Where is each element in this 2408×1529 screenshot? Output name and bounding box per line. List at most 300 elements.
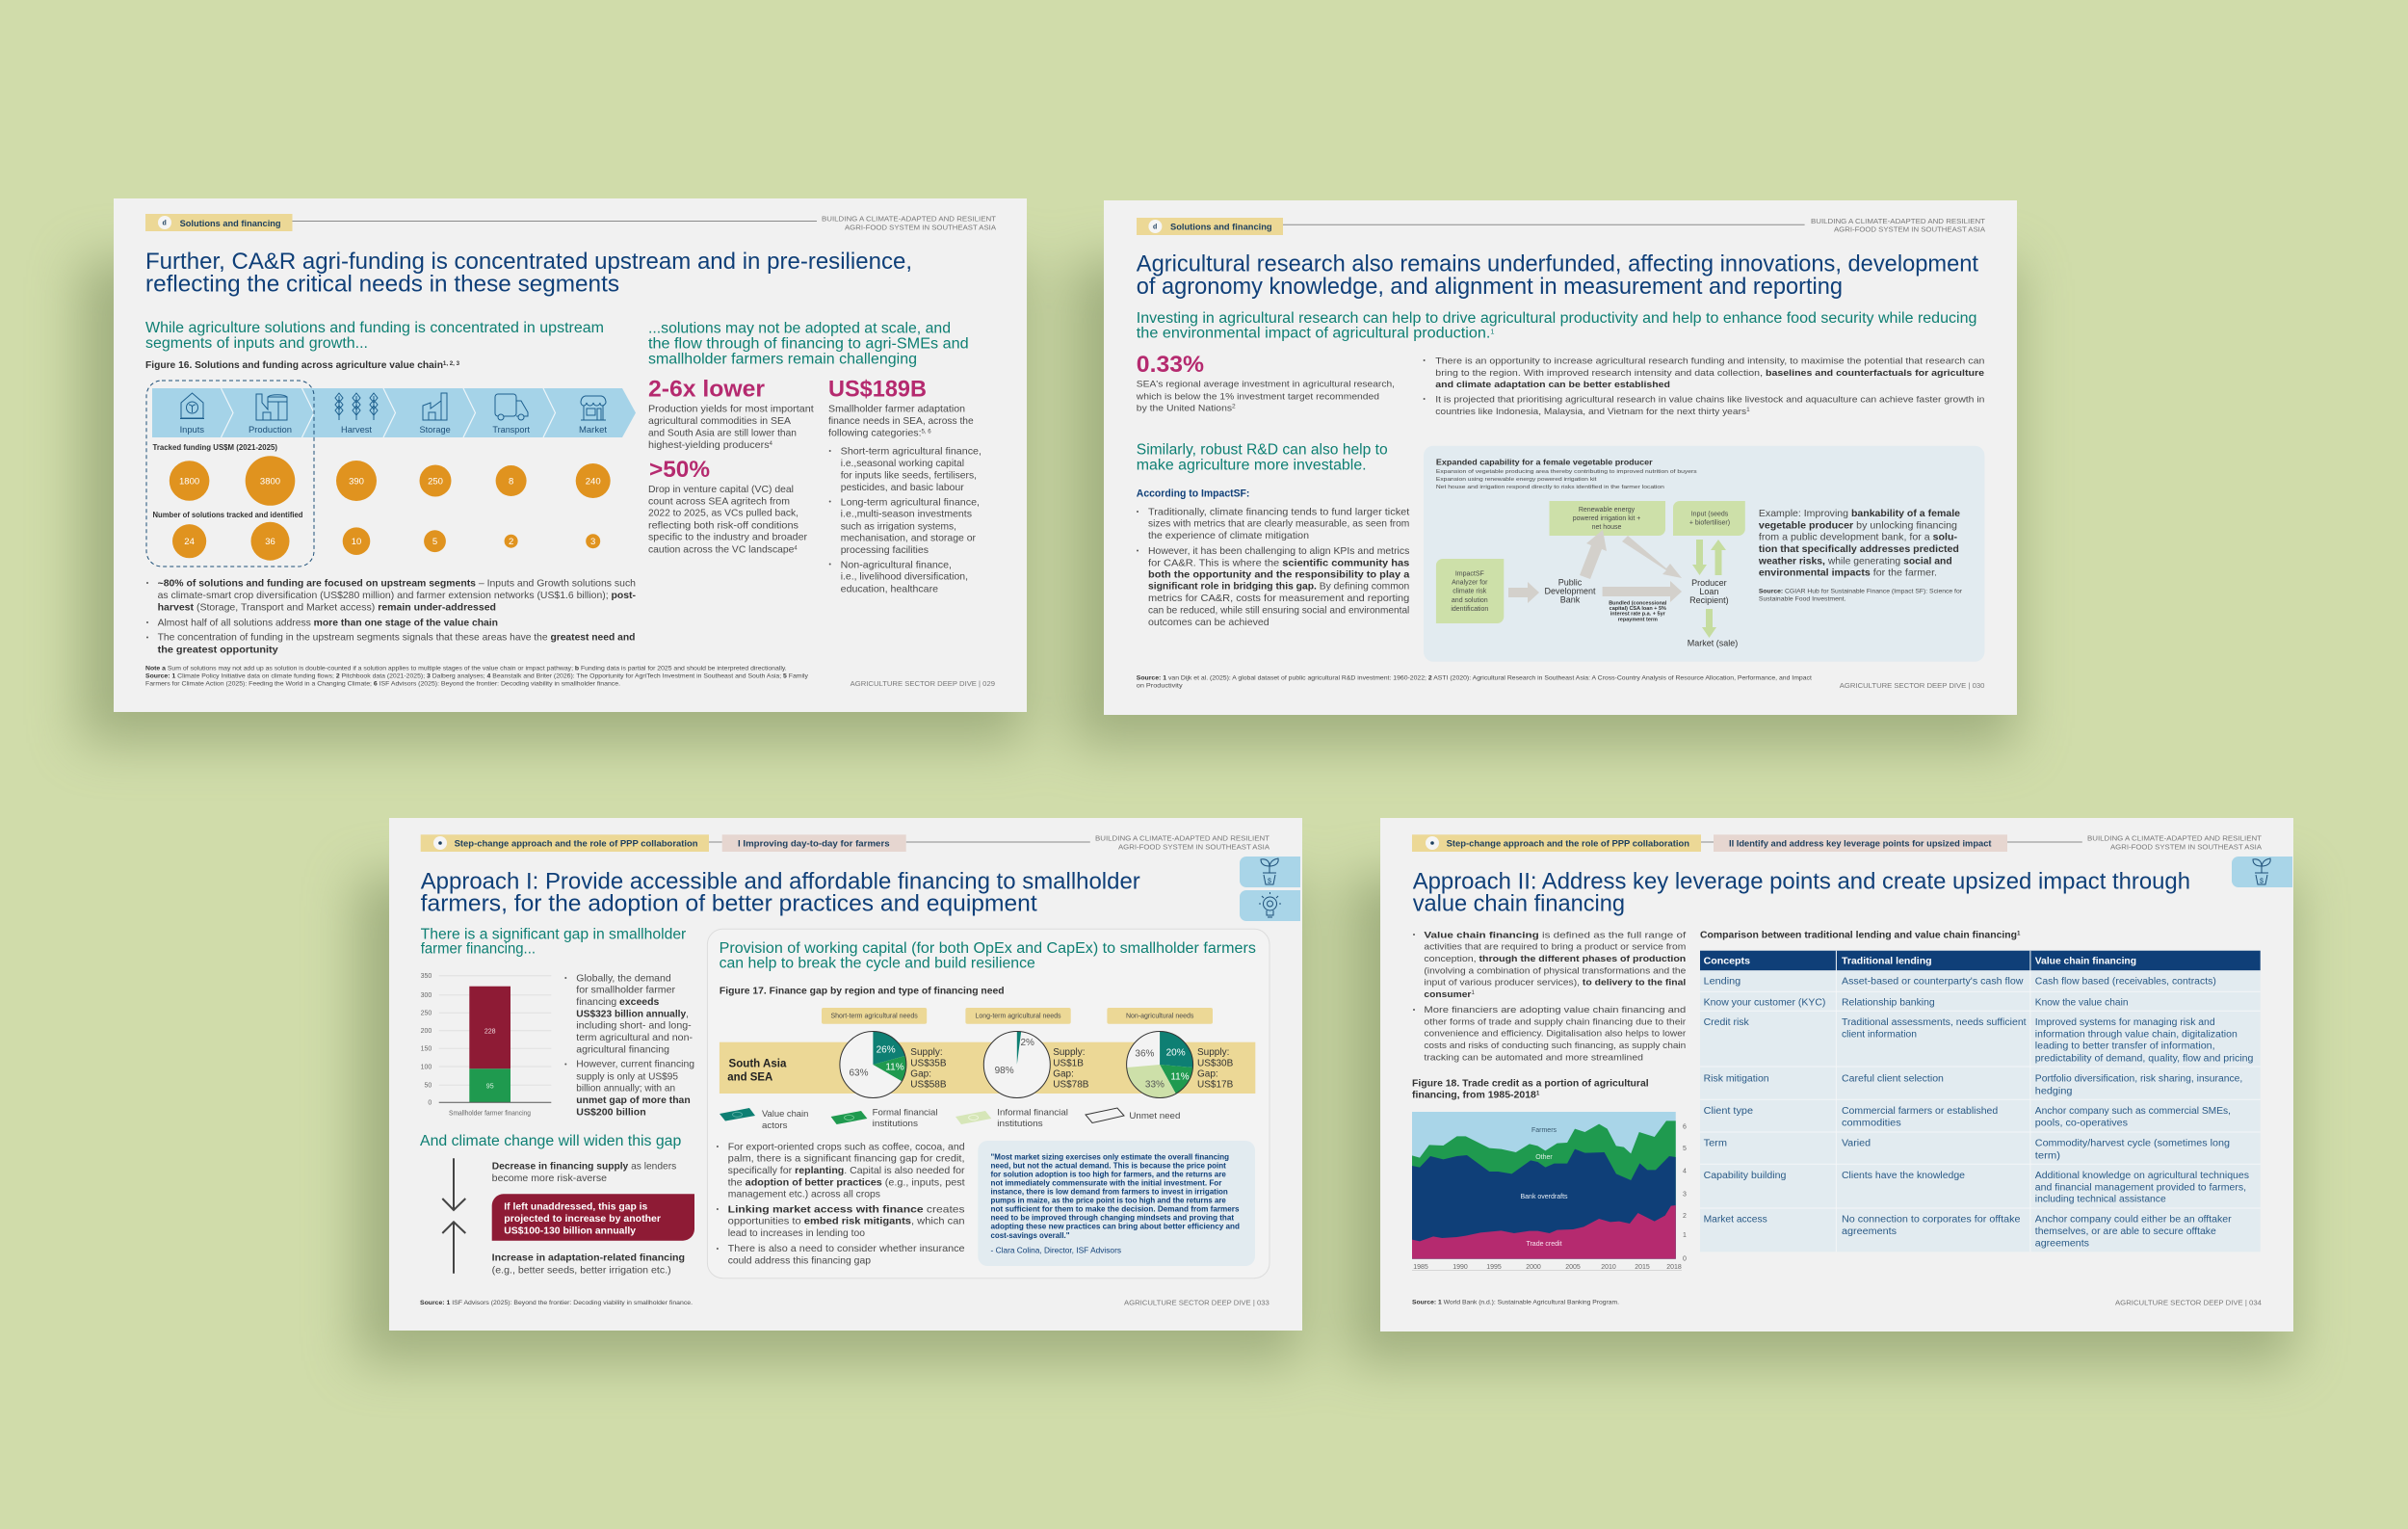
- figure 17 caption: Figure 17. Finance gap by region and type of financing need: [720, 987, 1005, 997]
- stacked bar chart: 300: [421, 992, 432, 999]
- box: renewable energy kit: Renewable energy: [1579, 507, 1636, 514]
- left heading: farmer financing...: [421, 940, 536, 957]
- diagram labels: repayment term: [1618, 617, 1658, 622]
- legend: Value chain: [762, 1109, 808, 1120]
- value chain bullets: tracking can be automated and more streamlined: [1424, 1052, 1643, 1063]
- row: market access: No connection to corporates for offtake: [1842, 1215, 2021, 1226]
- row: client type: Commercial farmers or established: [1842, 1106, 1998, 1117]
- legend: Informal financial: [997, 1107, 1068, 1118]
- area chart: trade credit: 2: [1683, 1213, 1687, 1220]
- financing need pills: Long-term agricultural needs: [975, 1014, 1061, 1020]
- text: increase in adaptation financing: [492, 1252, 685, 1276]
- quote box: adopting these new practices can bring about better efficiency and: [990, 1222, 1240, 1231]
- solutions count bubbles: 3: [590, 537, 595, 547]
- supply and gap figures: US$78B: [1053, 1080, 1089, 1091]
- table caption: 1: [2017, 931, 2021, 936]
- quote box: - Clara Colina, Director, ISF Advisors: [990, 1245, 1121, 1254]
- supply and gap figures: [910, 1047, 1234, 1091]
- subtitle: Investing in agricultural research can help to drive agricultural productivity and help to enhance food security while reducing: [1137, 310, 1976, 327]
- row: know your customer: Know the value chain: [2035, 997, 2129, 1008]
- panel heading: can help to break the cycle and build resilience: [720, 955, 1035, 971]
- stat: 0.33%: 0.33%: [1137, 352, 1204, 378]
- row: risk mitigation: Portfolio diversification, risk sharing, insurance,: [2035, 1074, 2242, 1085]
- row: capability building: Additional knowledge on agricultural techniques: [2035, 1171, 2249, 1181]
- page footer: AGRICULTURE SECTOR DEEP DIVE | 033: [1124, 1300, 1269, 1306]
- opportunity bullets: bring to the region. With improved research intensity and data collection, baselines and counterfactuals for agriculture: [1435, 368, 1984, 379]
- stat: over 50%: 2022 to 2025, as VCs pulled back,: [648, 508, 798, 519]
- report header: AGRI-FOOD SYSTEM IN SOUTHEAST ASIA: [845, 224, 996, 231]
- stacked bar chart: [421, 973, 551, 1118]
- supply and gap figures: US$1B: [1053, 1059, 1084, 1069]
- panel: example flow diagram: [1424, 446, 1984, 662]
- text: decrease in supply: Decrease in financing supply as lenders: [492, 1161, 676, 1173]
- panel heading: Provision of working capital (for both OpEx and CapEx) to smallholder farmers: [720, 940, 1256, 957]
- stat: US$189B: processing facilities: [841, 544, 929, 556]
- stat: US$189B: Long-term agricultural finance,: [841, 496, 980, 508]
- diagram labels: Bundled (concessional: [1609, 600, 1667, 606]
- notes and sources: Farmers for Climate Action (2025): Feeding the World in a Changing Climate; 6 ISF Advisors (2025): Beyond the frontier: Decoding viability in smallholder finance.: [145, 681, 620, 688]
- quote box: instance, there is low demand from farmers to invest in irrigation: [990, 1187, 1228, 1197]
- supply and gap figures: Supply:: [1197, 1047, 1229, 1058]
- report header: AGRI-FOOD SYSTEM IN SOUTHEAST ASIA: [2110, 844, 2262, 851]
- pie: short-term: 11%: [885, 1063, 904, 1073]
- title: Agricultural research also remains underfunded, affecting innovations, development: [1137, 251, 1978, 277]
- row: credit risk: Improved systems for managing risk and: [2035, 1017, 2215, 1028]
- chain labels: Harvest: [341, 425, 372, 435]
- row: capability building: Clients have the knowledge: [1842, 1171, 1965, 1181]
- stat: over 50%: >50%: [649, 457, 710, 483]
- example text: Sustainable Food Investment.: [1759, 596, 1846, 603]
- pie: non-agricultural: 36%: [1135, 1049, 1155, 1060]
- area chart: trade credit: 2018: [1666, 1264, 1682, 1271]
- area chart: trade credit: 4: [1683, 1168, 1687, 1175]
- stacked bar chart: 200: [421, 1028, 432, 1035]
- ImpactSF bullets: metrics for CA&R, costs for measurement and reporting: [1148, 593, 1409, 604]
- report header: [1095, 836, 1270, 851]
- financing need pills: Non-agricultural needs: [1126, 1014, 1194, 1020]
- report header: BUILDING A CLIMATE-ADAPTED AND RESILIENT: [1811, 219, 1986, 225]
- ImpactSF bullets: However, it has been challenging to align KPIs and metrics: [1148, 545, 1409, 557]
- according to ImpactSF: According to ImpactSF:: [1137, 488, 1249, 500]
- value chain bullets: More financiers are adopting value chain financing and: [1424, 1005, 1686, 1015]
- title: [1413, 868, 2190, 917]
- legend: [720, 1107, 1180, 1131]
- stat: over 50%: count across SEA agritech from: [648, 495, 790, 507]
- box: ImpactSF analyzer: and solution: [1452, 597, 1488, 604]
- chain labels: Inputs: [180, 425, 204, 435]
- row: client type: Client type: [1704, 1106, 1753, 1117]
- tracked funding bubbles: 250: [428, 476, 443, 488]
- stat: over 50%: reflecting both risk-off conditions: [648, 519, 798, 531]
- value chain bullets: (involving a combination of physical transformations and the: [1424, 965, 1686, 976]
- section tag: [421, 834, 709, 852]
- number of solutions label: Number of solutions tracked and identified: [152, 510, 302, 519]
- callout: gap projection: US$100-130 billion annually: [504, 1225, 636, 1236]
- left heading: [145, 320, 604, 352]
- pie: long-term: 98%: [995, 1066, 1014, 1076]
- ImpactSF bullets: Traditionally, climate financing tends to fund larger ticket: [1148, 506, 1409, 517]
- figure 18 caption: financing, from 1985-2018: [1412, 1090, 1531, 1100]
- quote box: pumps in maize, as the price point is too high and the returns are: [990, 1196, 1226, 1205]
- stat: US$189B: i.e.,multi-season investments: [841, 509, 972, 520]
- right heading: smallholder farmers remain challenging: [648, 351, 917, 367]
- row: credit risk: Traditional assessments, needs sufficient: [1842, 1017, 2027, 1028]
- source note: Source: 1 van Dijk et al. (2025): A global dataset of public agricultural R&D investment: 1960-2022; 2 ASTI (2020): Agricultural Research in Southeast Asia: A Cross-Country Analysis of Resource Allocation, Performance, and Impact: [1137, 675, 1812, 682]
- chain labels: Market: [579, 425, 607, 435]
- chain labels: Transport: [492, 425, 530, 435]
- panel heading: [720, 940, 1256, 971]
- stat: 2-6x lower: 4: [770, 441, 773, 447]
- area chart: trade credit: 1990: [1453, 1264, 1468, 1271]
- stat: US$189B: such as irrigation systems,: [841, 520, 956, 532]
- gap bullets: unmet gap of more than: [576, 1094, 691, 1106]
- icon: production: [256, 394, 287, 420]
- left heading: While agriculture solutions and funding is concentrated in upstream: [145, 320, 604, 336]
- panel heading: [1436, 457, 1697, 490]
- row: lending: Lending: [1704, 977, 1741, 988]
- diagram labels: Bank: [1560, 594, 1581, 604]
- title: Approach II: Address key leverage points and create upsized impact through: [1413, 868, 2190, 894]
- heading: robust R&D: [1137, 442, 1388, 474]
- arrows: input and market: [1692, 540, 1726, 638]
- notes and sources: Note a Sum of solutions may not add up as solution is double-counted if a solution applies to multiple stages of the value chain or impact pathway; b Funding data is partial for 2025 and should be interpreted directionally.: [145, 666, 787, 672]
- row: credit risk: leading to better transfer of information,: [2035, 1041, 2215, 1052]
- section tag: Solutions and financing: [1170, 222, 1272, 232]
- stat: over 50%: specific to the industry and broader: [648, 532, 807, 543]
- chain labels: Production: [249, 425, 292, 435]
- supply and gap figures: US$35B: [910, 1059, 947, 1069]
- example text: Source: CGIAR Hub for Sustainable Finance (Impact SF): Science for: [1759, 589, 1963, 595]
- section tag: d: [1153, 224, 1157, 231]
- stat: US$189B: education, healthcare: [841, 583, 938, 594]
- figure 18 caption: 1: [1536, 1091, 1540, 1096]
- arrows: capital flow: [1508, 530, 1682, 603]
- stat: 0.33%: SEA's regional average investment in agricultural research,: [1137, 380, 1395, 390]
- panel heading: Expansion of vegetable producing area thereby contributing to improved nutrition of buyers: [1436, 469, 1697, 475]
- box: input: + biofertiliser): [1689, 519, 1730, 526]
- report header: [2087, 836, 2263, 851]
- icon: inputs: [180, 393, 204, 418]
- stat: over 50%: [648, 457, 807, 555]
- icon tab: plant with money: $: [1268, 879, 1271, 884]
- supply and gap figures: Supply:: [910, 1047, 943, 1058]
- stat: 2-6x lower: and South Asia are still lower than: [648, 428, 797, 439]
- row: market access: Anchor company could either be an offtaker: [2035, 1215, 2232, 1226]
- example text: weather risks, while generating social and: [1758, 555, 1952, 567]
- row: know your customer: Relationship banking: [1842, 997, 1935, 1008]
- box: renewable energy kit: [1549, 501, 1665, 536]
- heading: robust R&D: Similarly, robust R&D can also help to: [1137, 442, 1388, 459]
- solutions count bubbles: 5: [432, 537, 437, 547]
- row: risk mitigation: Risk mitigation: [1704, 1074, 1769, 1085]
- box: renewable energy kit: net house: [1592, 524, 1621, 531]
- sub-section tag: [1714, 834, 2007, 852]
- quote box: for solution adoption is too high for farmers, and the returns are: [990, 1170, 1226, 1179]
- row: risk mitigation: Careful client selection: [1842, 1074, 1944, 1085]
- stat: US$189B: 5, 6: [922, 430, 931, 435]
- row: lending: Asset-based or counterparty's cash flow: [1842, 977, 2024, 988]
- value chain bullets: consumer: [1424, 989, 1472, 1000]
- title: value chain financing: [1413, 891, 1625, 917]
- row: term: Varied: [1842, 1139, 1871, 1149]
- text: decrease in supply: become more risk-averse: [492, 1173, 607, 1184]
- area chart: trade credit: 2010: [1601, 1264, 1616, 1271]
- chain labels: Storage: [420, 425, 451, 435]
- text: increase in adaptation financing: (e.g., better seeds, better irrigation etc.): [492, 1264, 671, 1276]
- text: increase in adaptation financing: Increase in adaptation-related financing: [492, 1252, 685, 1264]
- stacked bar chart: 150: [421, 1046, 432, 1052]
- diagram labels: Loan: [1699, 587, 1718, 596]
- tracked funding bubbles: 8: [509, 476, 513, 488]
- stat: US$189B: following categories:: [828, 428, 920, 439]
- box: input: [1673, 501, 1745, 536]
- source note: [1137, 675, 1812, 690]
- ImpactSF bullets: significant role in bridging this gap. By defining common: [1148, 581, 1409, 593]
- text: decrease in supply: [492, 1161, 676, 1184]
- value chain bullets: other forms of trade and supply chain financing due to their: [1424, 1016, 1686, 1027]
- row: market access: Market access: [1704, 1215, 1767, 1226]
- table caption: Comparison between traditional lending and value chain financing: [1700, 930, 2004, 940]
- box: ImpactSF analyzer: identification: [1451, 606, 1488, 613]
- stacked bar chart: 228: [484, 1029, 496, 1035]
- region band: [720, 1042, 1255, 1094]
- quote box: "Most market sizing exercises only estimate the overall financing: [990, 1152, 1229, 1162]
- slide 4 background: [1380, 818, 2293, 1331]
- row: lending: [1704, 977, 2216, 988]
- solutions count bubbles: 10: [352, 537, 361, 547]
- diagram labels: [1544, 577, 1738, 648]
- section tag: d: [162, 220, 167, 227]
- sub-section tag: I Improving day-to-day for farmers: [738, 838, 890, 849]
- solutions count bubbles: 2: [509, 537, 513, 547]
- area chart: trade credit: [1412, 1112, 1687, 1271]
- opportunity bullets: [1424, 356, 1984, 417]
- stat: over 50%: caution across the VC landscape: [648, 543, 797, 555]
- quote box: need, but not the actual demand. This is because the price point: [990, 1161, 1226, 1171]
- supply and gap figures: US$58B: [910, 1080, 947, 1091]
- row: credit risk: Credit risk: [1704, 1017, 1750, 1028]
- ImpactSF bullets: [1137, 506, 1410, 628]
- gap bullets: However, current financing: [576, 1059, 694, 1070]
- finance bullets: Linking market access with finance creates: [728, 1203, 965, 1215]
- gap bullets: supply is only at US$95: [576, 1070, 678, 1082]
- title: farmers, for the adoption of better practices and equipment: [421, 891, 1037, 917]
- report header: BUILDING A CLIMATE-ADAPTED AND RESILIENT: [1095, 836, 1270, 843]
- value chain bullets: convenience and efficiency. Digitalisation also helps to lower: [1424, 1029, 1686, 1040]
- opportunity bullets: countries like Indonesia, Malaysia, and Vietnam for the next thirty years: [1435, 407, 1724, 417]
- area chart: trade credit: 2000: [1526, 1264, 1541, 1271]
- row: credit risk: information through value chain, digitalization: [2035, 1029, 2238, 1040]
- report header: AGRI-FOOD SYSTEM IN SOUTHEAST ASIA: [1118, 844, 1269, 851]
- legend: institutions: [873, 1119, 918, 1129]
- pie: non-agricultural: 11%: [1170, 1072, 1190, 1083]
- stacked bar chart: Smallholder farmer financing: [449, 1111, 531, 1118]
- slide 1: upstream funding: [114, 198, 1027, 712]
- row: term: Term: [1704, 1139, 1727, 1149]
- left heading: [421, 926, 686, 957]
- value chain bullets: conception, through the different phases of production: [1424, 954, 1687, 964]
- supply and gap figures: Gap:: [910, 1069, 931, 1080]
- report header: [822, 217, 997, 231]
- area chart: trade credit: Other: [1535, 1154, 1553, 1161]
- stat: over 50%: Drop in venture capital (VC) deal: [648, 484, 794, 495]
- example text: environmental impacts for the farmer.: [1759, 567, 1937, 579]
- finance bullets: palm, there is a significant financing gap for credit,: [728, 1153, 965, 1165]
- stat: 0.33%: 2: [1232, 405, 1236, 410]
- right heading: ...solutions may not be adopted at scale, and: [648, 320, 951, 336]
- value chain bullets: input of various producer services), to delivery to the final: [1424, 978, 1686, 989]
- row: credit risk: predictability of demand, quality, flow and pricing: [2035, 1053, 2253, 1064]
- slide 3: Approach I: [389, 818, 1302, 1331]
- area chart: trade credit: Farmers: [1531, 1127, 1557, 1134]
- stat: US$189B: i.e., livelihood diversification,: [841, 571, 968, 583]
- heading: climate change: And climate change will widen this gap: [420, 1133, 681, 1149]
- finance bullets: management etc.) across all crops: [728, 1189, 880, 1200]
- box: ImpactSF analyzer: [1436, 559, 1504, 623]
- gap bullets: agricultural financing: [576, 1043, 669, 1055]
- gap bullets: financing exceeds: [576, 996, 659, 1008]
- source note: Source: 1 ISF Advisors (2025): Beyond the frontier: Decoding viability in smallholder finance.: [420, 1300, 693, 1306]
- row: client type: pools, co-operatives: [2035, 1118, 2128, 1128]
- supply and gap figures: Supply:: [1053, 1047, 1086, 1058]
- page footer: AGRICULTURE SECTOR DEEP DIVE | 030: [1840, 683, 1985, 690]
- example text: tion that specifically addresses predicted: [1759, 543, 1959, 555]
- panel heading: Expanded capability for a female vegetable producer: [1436, 457, 1653, 466]
- finance bullets: [717, 1141, 965, 1266]
- finance bullets: There is also a need to consider whether insurance: [728, 1243, 965, 1254]
- pie: short-term: 63%: [849, 1068, 869, 1079]
- supply and gap figures: US$17B: [1197, 1080, 1234, 1091]
- stacked bar chart: 0: [428, 1100, 432, 1106]
- quote box: not sufficient for them to make the decision. Demand from farmers: [990, 1204, 1240, 1214]
- stat: 2-6x lower: [648, 377, 814, 451]
- opportunity bullets: It is projected that prioritising agricultural research in value chains like livestock and aquaculture can achieve faster growth in: [1435, 394, 1984, 405]
- row: term: Commodity/harvest cycle (sometimes long: [2035, 1139, 2230, 1149]
- stat: 2-6x lower: 2-6x lower: [648, 377, 765, 403]
- subtitle: 1: [1490, 330, 1495, 336]
- left bullets: ~80% of solutions and funding are focused on upstream segments – Inputs and Growth solutions such: [158, 577, 636, 589]
- stat: US$189B: finance needs in SEA, across the: [828, 415, 974, 427]
- opportunity bullets: There is an opportunity to increase agricultural research funding and intensity, to maximise the potential that research can: [1435, 356, 1984, 366]
- table header: Value chain financing: [2035, 957, 2136, 967]
- row: capability building: including technical assistance: [2035, 1195, 2166, 1205]
- row: client type: commodities: [1842, 1118, 1901, 1128]
- value chain bullets: [1413, 930, 1687, 1063]
- gap bullets: billion annually; with an: [576, 1083, 675, 1094]
- stat: US$189B: [828, 377, 982, 594]
- left heading: There is a significant gap in smallholder: [421, 926, 686, 942]
- callout: gap projection: projected to increase by another: [504, 1213, 661, 1225]
- slide 3 background: [389, 818, 1302, 1331]
- stat: 0.33%: [1136, 352, 1395, 414]
- stat: US$189B: Smallholder farmer adaptation: [828, 404, 965, 415]
- sub-section tag: [722, 834, 906, 852]
- row: term: [1704, 1139, 2230, 1161]
- tracked funding bubbles: 240: [586, 476, 601, 488]
- row: client type: [1704, 1106, 2231, 1128]
- area chart: trade credit: 1985: [1413, 1264, 1428, 1271]
- tracked funding bubbles: 1800: [179, 476, 199, 488]
- example text: from a public development bank, for a solu-: [1759, 532, 1957, 543]
- box: ImpactSF analyzer: Analyzer for: [1452, 580, 1488, 587]
- pie: long-term: [983, 1031, 1050, 1098]
- tracked funding bubbles: 390: [349, 476, 364, 488]
- area chart: trade credit: 5: [1683, 1146, 1687, 1152]
- icon tab: plant with money: [2232, 857, 2292, 887]
- title: [1137, 251, 1978, 300]
- row: credit risk: [1704, 1017, 2253, 1064]
- sub-section tag: II Identify and address key leverage points for upsized impact: [1729, 838, 1992, 849]
- legend: actors: [762, 1120, 788, 1131]
- heading: robust R&D: make agriculture more investable.: [1137, 458, 1367, 474]
- row: market access: agreements: [1842, 1226, 1897, 1237]
- diagram labels: Public: [1558, 577, 1583, 587]
- stat: 0.33%: by the United Nations: [1137, 404, 1224, 414]
- diagram labels: Recipient): [1689, 595, 1729, 605]
- section tag: Solutions and financing: [180, 219, 281, 229]
- left heading: segments of inputs and growth...: [145, 335, 368, 352]
- supply and gap figures: US$30B: [1197, 1059, 1234, 1069]
- slide 2 background: [1104, 200, 2017, 715]
- gap bullets: including short- and long-: [576, 1020, 692, 1032]
- row: know your customer: Know your customer (KYC): [1704, 997, 1825, 1008]
- stacked bar chart: 100: [421, 1064, 432, 1070]
- section tag: [145, 214, 293, 231]
- stat: 2-6x lower: agricultural commodities in SEA: [648, 415, 791, 427]
- section tag: Step-change approach and the role of PPP collaboration: [1447, 838, 1689, 849]
- stat: US$189B: Short-term agricultural finance,: [841, 446, 982, 458]
- gap bullets: Globally, the demand: [576, 972, 671, 984]
- icon: harvest wheat: [335, 393, 378, 420]
- legend: Formal financial: [873, 1107, 938, 1118]
- panel heading: Expansion using renewable energy powered irrigation kit: [1436, 477, 1597, 483]
- slide 1 background: [114, 198, 1027, 712]
- gap bullets: US$323 billion annually,: [576, 1008, 689, 1019]
- row: lending: Cash flow based (receivables, contracts): [2035, 977, 2216, 988]
- title: [421, 868, 1140, 917]
- table header: Concepts: [1704, 957, 1750, 967]
- stat: 0.33%: which is below the 1% investment target recommended: [1136, 391, 1379, 402]
- source note: on Productivity: [1137, 683, 1183, 690]
- solutions count bubbles: 24: [184, 537, 195, 547]
- stat: US$189B: mechanisation, and storage or: [841, 533, 976, 544]
- slide 2: agricultural research: [1104, 200, 2017, 715]
- ImpactSF bullets: for CA&R. This is where the scientific community has: [1148, 557, 1409, 568]
- pie: short-term: 26%: [877, 1045, 896, 1056]
- figure 18 caption: [1412, 1078, 1649, 1100]
- figure 18 caption: Figure 18. Trade credit as a portion of agricultural: [1412, 1078, 1649, 1089]
- report header: [1811, 219, 1986, 234]
- row: risk mitigation: hedging: [2035, 1086, 2072, 1096]
- panel: working capital: [707, 929, 1269, 1279]
- right heading: [648, 320, 969, 367]
- icon: storage silo: [423, 393, 447, 420]
- pie: long-term: 2%: [1020, 1038, 1034, 1048]
- row: client type: Anchor company such as commercial SMEs,: [2035, 1106, 2231, 1117]
- stat: US$189B: Non-agricultural finance,: [841, 559, 952, 570]
- row: market access: themselves, or are able to secure offtake: [2035, 1226, 2216, 1237]
- quote box: need to be improved through changing mindsets and proving that: [990, 1213, 1234, 1223]
- upstream dashed highlight: [146, 381, 314, 567]
- area chart: trade credit: 0: [1683, 1256, 1687, 1262]
- value chain bullets: 1: [1471, 990, 1476, 996]
- solutions count bubbles: [172, 522, 600, 561]
- financing need pills: [822, 1008, 1213, 1024]
- chain labels: [180, 425, 607, 435]
- left bullets: the greatest opportunity: [158, 644, 278, 655]
- subtitle: [1137, 310, 1976, 342]
- stacked bar chart: 250: [421, 1010, 432, 1017]
